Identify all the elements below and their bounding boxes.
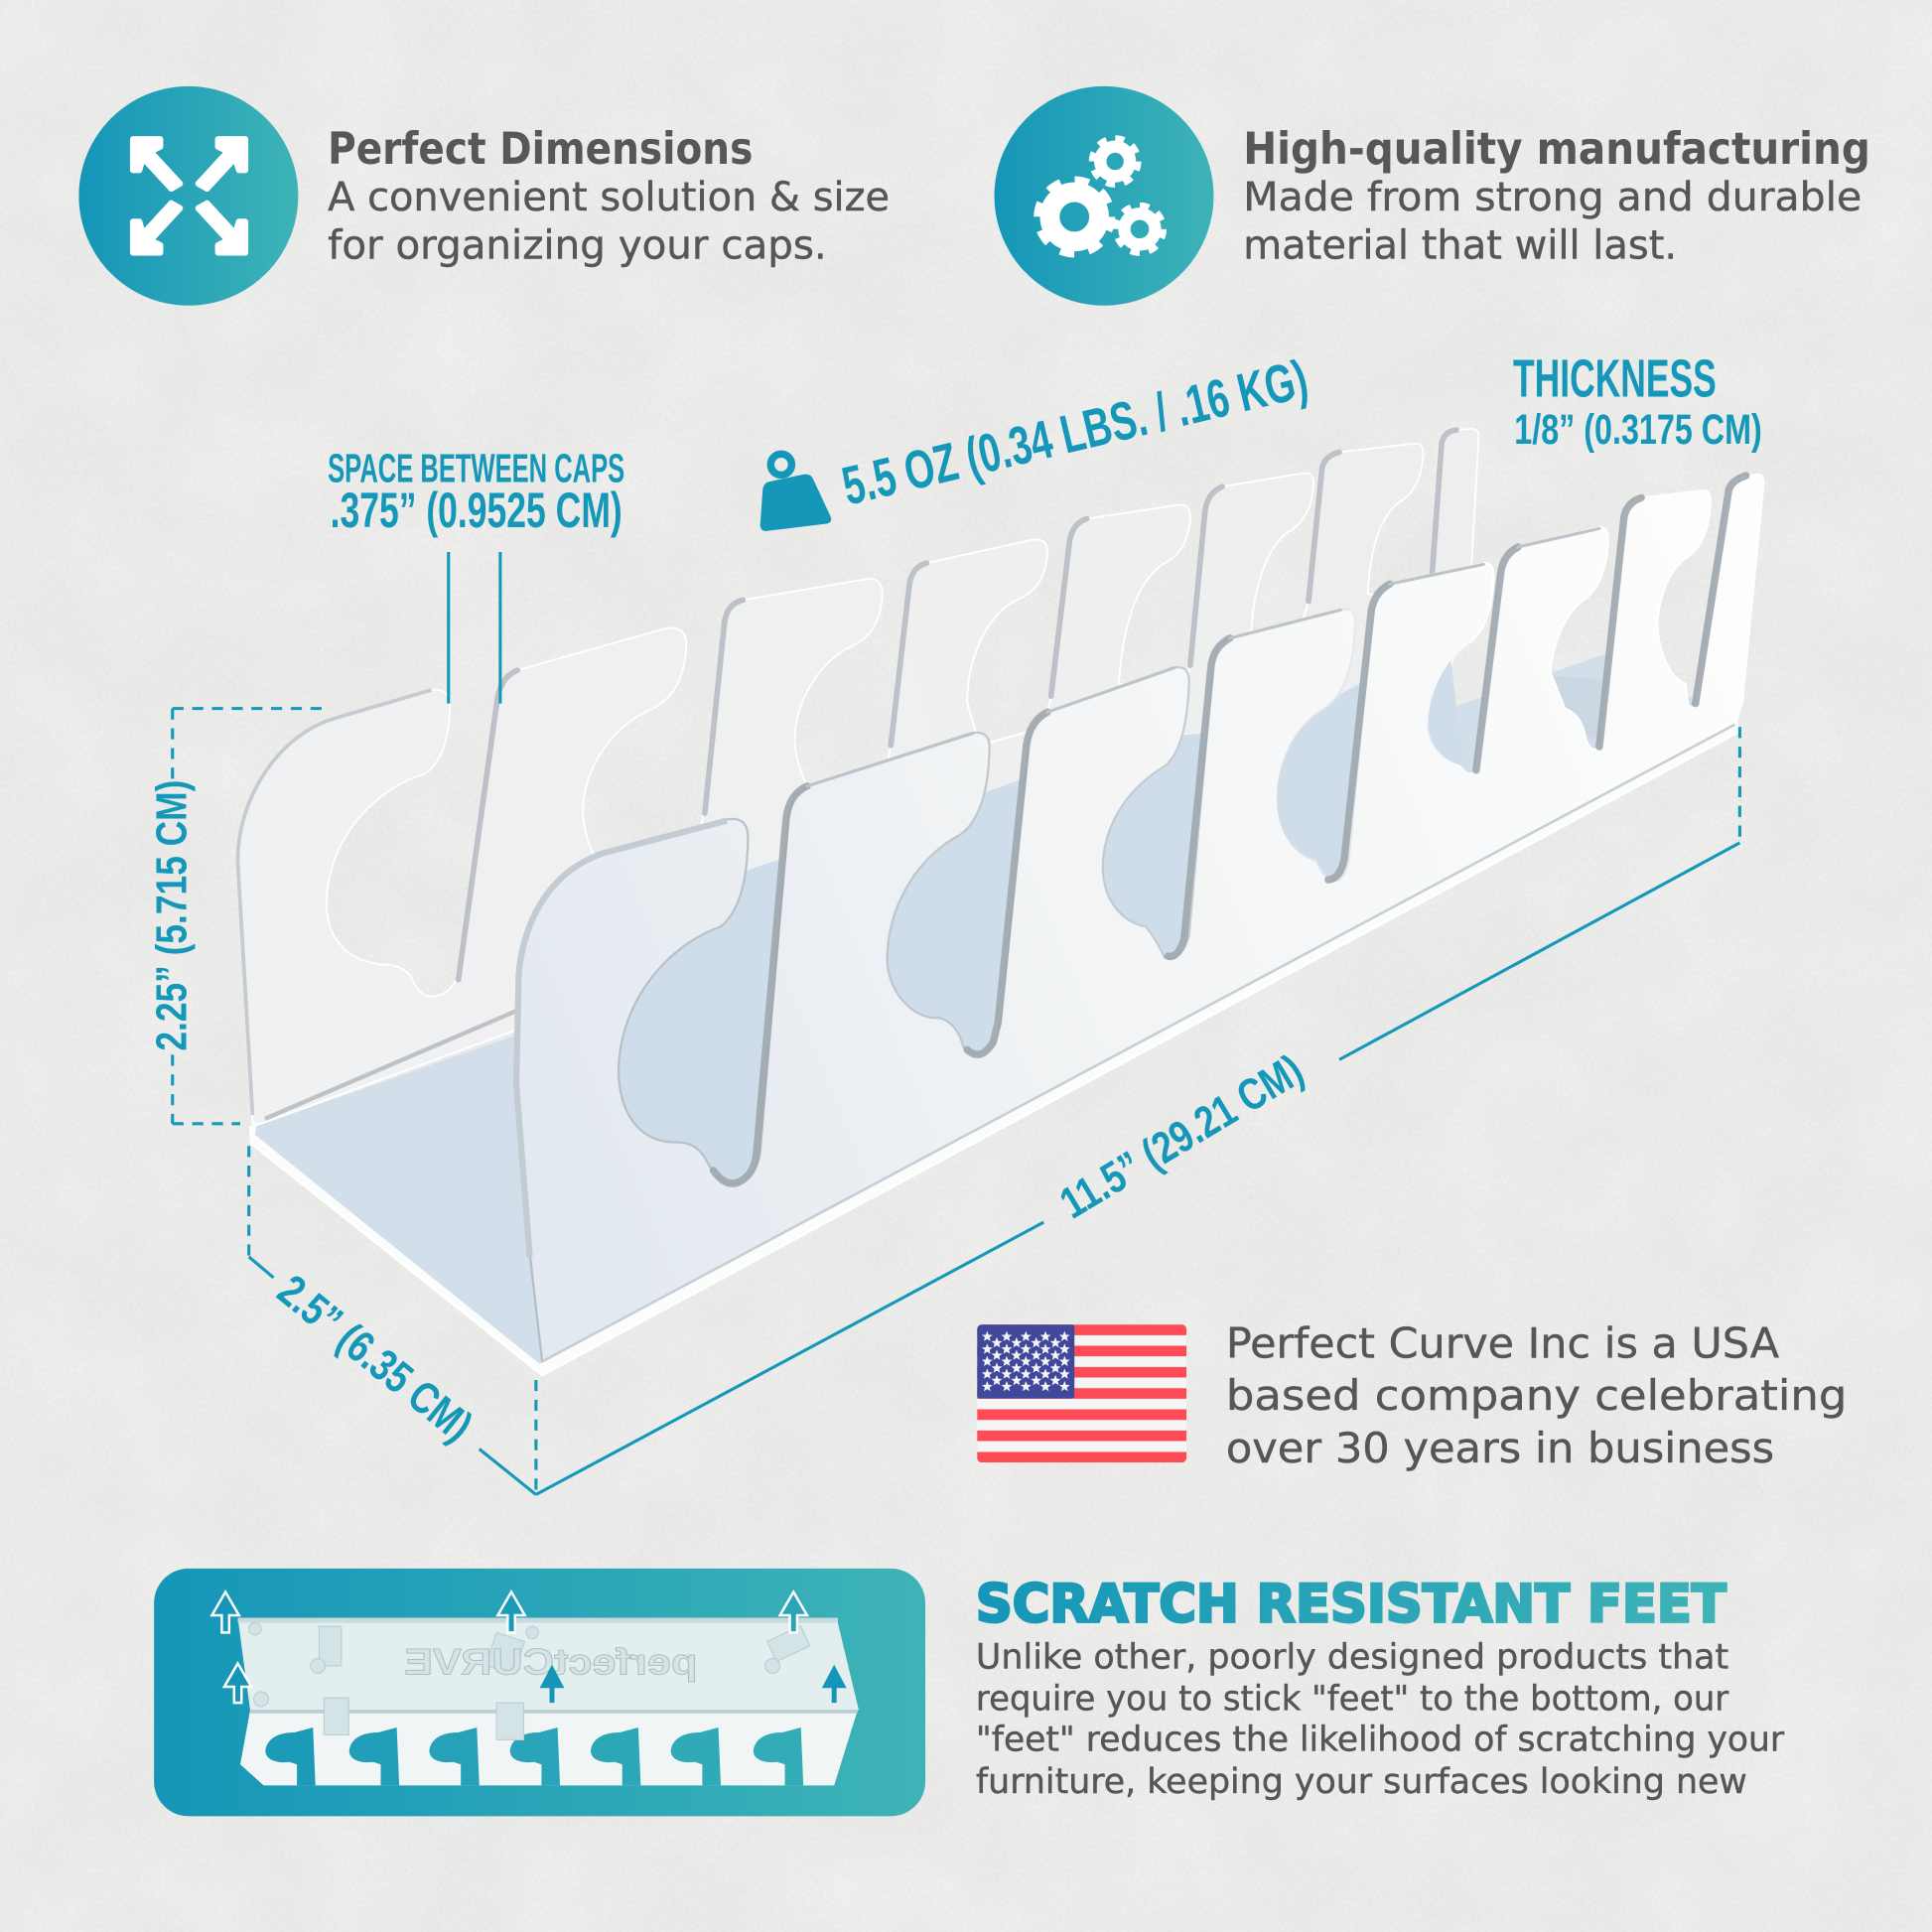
heading: high-quality manufacturing: High-quality manufacturing	[1243, 123, 1870, 175]
text: strong and durable	[1243, 175, 1862, 269]
feature: high-quality manufacturing	[995, 86, 1870, 306]
engraved logo: perfectCURVE	[404, 1641, 697, 1683]
arrow: foot marker 4	[224, 1663, 251, 1703]
callout: USA based company	[977, 1319, 1847, 1472]
back wall	[237, 429, 1478, 1124]
dimension: weight: 5.5 OZ (0.34 LBS. / .16 KG)	[837, 348, 1313, 517]
front tooth top edges	[807, 528, 1599, 786]
blue view through front notches	[592, 634, 1466, 1257]
plate top edge	[238, 1618, 838, 1622]
text: company description: based company celebrating	[1226, 1371, 1847, 1420]
front tooth edges	[714, 476, 1746, 1183]
dimension: overall height: 2.25” (5.715 CM)	[148, 780, 196, 1051]
front wall with notches	[515, 475, 1763, 1361]
front left edge	[516, 821, 727, 1257]
arrow: foot marker 6	[822, 1665, 847, 1703]
dimension: thickness: THICKNESS	[1513, 350, 1717, 409]
base plate	[250, 712, 1738, 1375]
plate edge	[250, 1710, 858, 1713]
dimension: thickness	[1513, 350, 1762, 453]
dimension: space between caps: .375” (0.9525 CM)	[331, 483, 622, 538]
text: company description: over 30 years in business	[1226, 1424, 1774, 1472]
heading: scratch resistant feet: SCRATCH RESISTANT FEET	[976, 1575, 1726, 1634]
dimension: thickness: 1/8” (0.3175 CM)	[1514, 406, 1762, 453]
back wall outer edge	[237, 690, 431, 1115]
underside plate	[238, 1618, 859, 1711]
dimension: length: 11.5” (29.21 CM)	[1052, 1045, 1311, 1228]
arrow: foot marker 1	[211, 1591, 239, 1632]
panel: underside photo with feet	[154, 1569, 925, 1816]
text: feet description: "feet" reduces the likelihood of scratching your	[976, 1721, 1785, 1760]
floor	[255, 653, 1731, 1364]
text: convenient solution: A convenient solution & size	[328, 175, 890, 220]
text: strong and durable: Made from strong and durable	[1243, 175, 1862, 220]
text: feet description: Unlike other, poorly designed products that	[976, 1637, 1728, 1677]
product photo: clear cap organizer	[237, 429, 1763, 1375]
feet	[249, 1622, 810, 1739]
feature: perfect dimensions	[78, 86, 890, 306]
icon: gears	[995, 86, 1213, 306]
back tooth edges	[459, 430, 1456, 980]
icon: USA flag	[977, 1324, 1186, 1462]
text: feet description: require you to stick "feet" to the bottom, our	[976, 1680, 1729, 1720]
icon: weight	[760, 454, 831, 531]
text: feet description: furniture, keeping your surfaces looking new	[976, 1762, 1747, 1802]
dimension: length	[536, 727, 1739, 1494]
text: company description: Perfect Curve Inc is a USA	[1226, 1319, 1779, 1368]
dimension: space between caps	[328, 445, 624, 704]
back wall corner shading	[265, 1011, 517, 1119]
arrow: foot marker 3	[780, 1591, 807, 1632]
text: company description	[1226, 1319, 1847, 1472]
dimension: overall height	[148, 709, 331, 1124]
text: feet description	[976, 1637, 1785, 1802]
text: convenient solution	[328, 175, 890, 269]
dimension: width	[249, 1146, 536, 1494]
notches between teeth	[265, 1727, 803, 1785]
back floor sliver	[1547, 675, 1616, 740]
callout: scratch resistant feet	[976, 1575, 1785, 1802]
text: convenient solution: for organizing your caps.	[328, 223, 827, 269]
dimension: width: 2.5” (6.35 CM)	[268, 1266, 482, 1451]
arrow: foot marker 2	[497, 1591, 525, 1632]
front base edge	[542, 725, 1734, 1361]
dimension: weight	[760, 348, 1313, 531]
icon: expand arrows	[78, 86, 298, 306]
teeth band	[240, 1711, 858, 1785]
dimension: space between caps: SPACE BETWEEN CAPS	[328, 445, 624, 490]
arrow: foot marker 5	[540, 1665, 564, 1703]
heading: perfect dimensions: Perfect Dimensions	[328, 123, 753, 175]
text: strong and durable: material that will last.	[1243, 223, 1677, 269]
